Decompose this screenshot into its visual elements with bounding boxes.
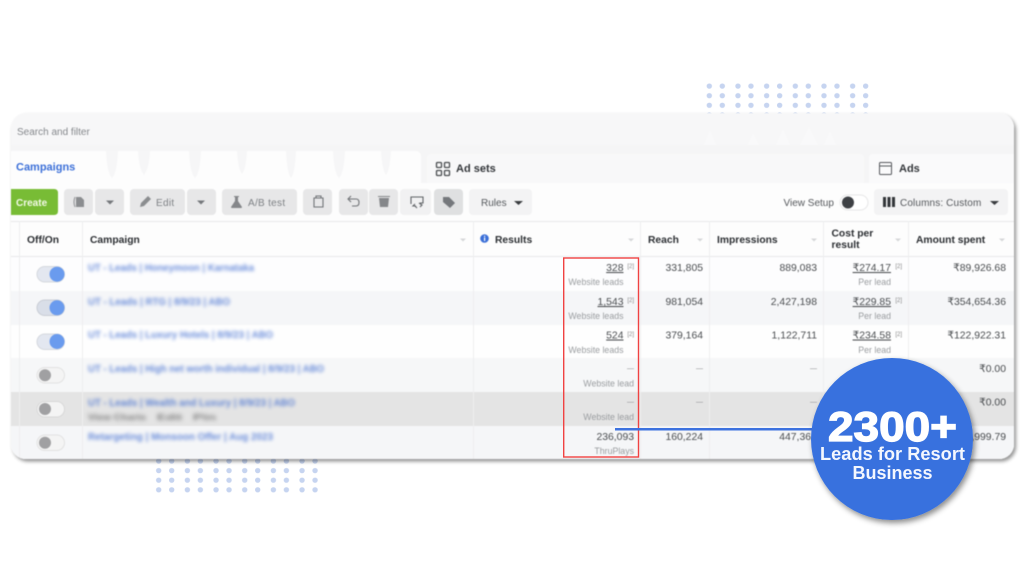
reach column: — [696, 399, 703, 406]
results column: [2] [627, 264, 634, 270]
view setup toggle [784, 195, 868, 210]
impressions column: — [810, 399, 817, 406]
impressions column: 447,36 [779, 432, 811, 443]
results column: — [627, 399, 634, 406]
button: swap [400, 189, 431, 215]
impressions column: 2,427,198 [771, 297, 817, 308]
reach column: 379,164 [665, 330, 703, 342]
cost per result column: [2] [895, 332, 902, 338]
table header: Impressions [717, 235, 778, 246]
impressions column: 1,122,711 [772, 330, 817, 342]
view setup toggle: View Setup [784, 198, 834, 209]
impressions column [771, 263, 817, 443]
impressions column: — [810, 366, 817, 372]
blurred campaign names: UT - Leads | Wealth and Luxury | 8/9/23 | ABO [88, 398, 295, 409]
tab: campaigns: Campaigns [16, 162, 75, 174]
blurred row detail line: Edit [157, 413, 183, 422]
amount spent column: ₹0.00 [979, 364, 1006, 375]
table header: Cost per [832, 228, 873, 240]
table header: Campaign [90, 235, 140, 246]
amount spent column: ₹354,654.36 [947, 297, 1006, 308]
toggles off [37, 368, 64, 450]
results column [568, 263, 635, 456]
amount spent column [947, 263, 1006, 443]
blurred campaign names: UT - Leads | Honeymoon | Karnataka [88, 263, 254, 274]
cost per result column: ₹274.17 [853, 263, 891, 274]
results column: [2] [627, 298, 634, 304]
table header: Reach [648, 235, 679, 246]
button: duplicate menu [95, 189, 124, 215]
button: create [11, 189, 58, 215]
table row backgrounds [11, 221, 1014, 459]
button: clipboard [303, 189, 332, 215]
blurred campaign names: UT - Leads | High net worth individual | 8/9/23 | ABO [88, 364, 324, 375]
reach column: 160,224 [665, 432, 703, 443]
blurred campaign names: UT - Leads | Luxury Hotels | 8/9/23 | ABO [88, 330, 273, 341]
results column: ThruPlays [594, 446, 635, 456]
blurred row detail line [88, 413, 216, 422]
button: a/b test: A/B test [248, 198, 285, 209]
reach column: — [696, 366, 703, 372]
results column: [2] [627, 332, 634, 338]
button: edit menu [187, 189, 216, 215]
blurred row detail line: Pin [193, 413, 216, 422]
ads manager panel [11, 113, 1014, 459]
cost per result column [853, 263, 902, 355]
table header: result [832, 240, 860, 251]
badge: 2300+ leads: 2300+ [828, 403, 957, 450]
results column: 524 [606, 330, 624, 342]
button: tag [434, 189, 463, 215]
results column: 1,543 [597, 297, 624, 308]
table header: Amount spent [916, 235, 986, 246]
table header: Off/On [27, 235, 59, 246]
badge: 2300+ leads: Leads for Resort [820, 443, 965, 464]
cost per result column: Per lead [858, 311, 891, 321]
results column: Website leads [568, 311, 624, 321]
impressions column: 889,083 [779, 263, 817, 274]
cost per result column: ₹234.58 [853, 330, 891, 342]
reach column [665, 263, 703, 443]
blurred campaign names [88, 263, 324, 443]
button: edit: Edit [156, 198, 174, 209]
badge: 2300+ leads: Business [852, 462, 932, 483]
blurred row detail line: View Charts [88, 413, 147, 422]
results column: Website leads [568, 277, 624, 287]
decorative dot grid: top right [706, 82, 871, 120]
button: rules [469, 189, 532, 215]
blurred campaign names: Retargeting | Monsoon Offer | Aug 2023 [88, 432, 273, 443]
button: a/b test [222, 189, 297, 215]
tab: ads [878, 161, 920, 176]
button: columns custom [874, 189, 1008, 215]
reach column: 981,054 [665, 297, 703, 308]
decorative dot grid: bottom left [155, 457, 320, 495]
tab: ad sets: Ad sets [456, 163, 496, 175]
cost per result column: Per lead [858, 277, 891, 287]
cost per result column: [2] [895, 264, 902, 270]
button: columns custom: Columns: Custom [900, 198, 981, 209]
blue underline [615, 428, 830, 430]
cost per result column: Per lead [858, 345, 891, 355]
red highlight box around results [564, 258, 638, 457]
button: rules: Rules [481, 198, 507, 209]
search and filter bar [16, 117, 1008, 136]
cost per result column: ₹229.85 [853, 297, 891, 308]
table header: Results [495, 235, 532, 246]
reach column: 331,805 [665, 263, 703, 274]
amount spent column: ₹89,926.68 [953, 263, 1006, 274]
icon: ad sets grid [436, 162, 450, 176]
amount spent column: ₹122,922.31 [947, 330, 1006, 342]
tab: ad sets [435, 161, 496, 177]
button: undo [339, 189, 368, 215]
results column: Website lead [583, 412, 634, 422]
cost per result column: [2] [895, 298, 902, 304]
icon: info [480, 234, 489, 243]
results column: — [627, 366, 634, 372]
results column: Website lead [583, 378, 634, 388]
results column: 236,093 [596, 432, 634, 443]
tab: ads: Ads [899, 163, 920, 175]
results column: Website leads [568, 345, 624, 355]
blurred campaign names: UT - Leads | RTG | 8/9/23 | ABO [88, 297, 230, 308]
button: edit [130, 189, 185, 215]
icon: ads window [880, 162, 892, 174]
button: duplicate [64, 189, 93, 215]
table [11, 221, 1014, 459]
amount spent column: ₹0.00 [979, 398, 1006, 408]
button: delete [369, 189, 398, 215]
tab strip [11, 145, 1014, 183]
badge: 2300+ leads [811, 358, 973, 520]
toolbar [10, 188, 1008, 216]
results column: 328 [606, 263, 624, 274]
table header [27, 228, 1005, 251]
amount spent column: ,999.79 [971, 432, 1006, 443]
toggles on [37, 266, 64, 350]
search and filter bar: Search and filter [17, 127, 90, 138]
button: create: Create [16, 198, 48, 209]
